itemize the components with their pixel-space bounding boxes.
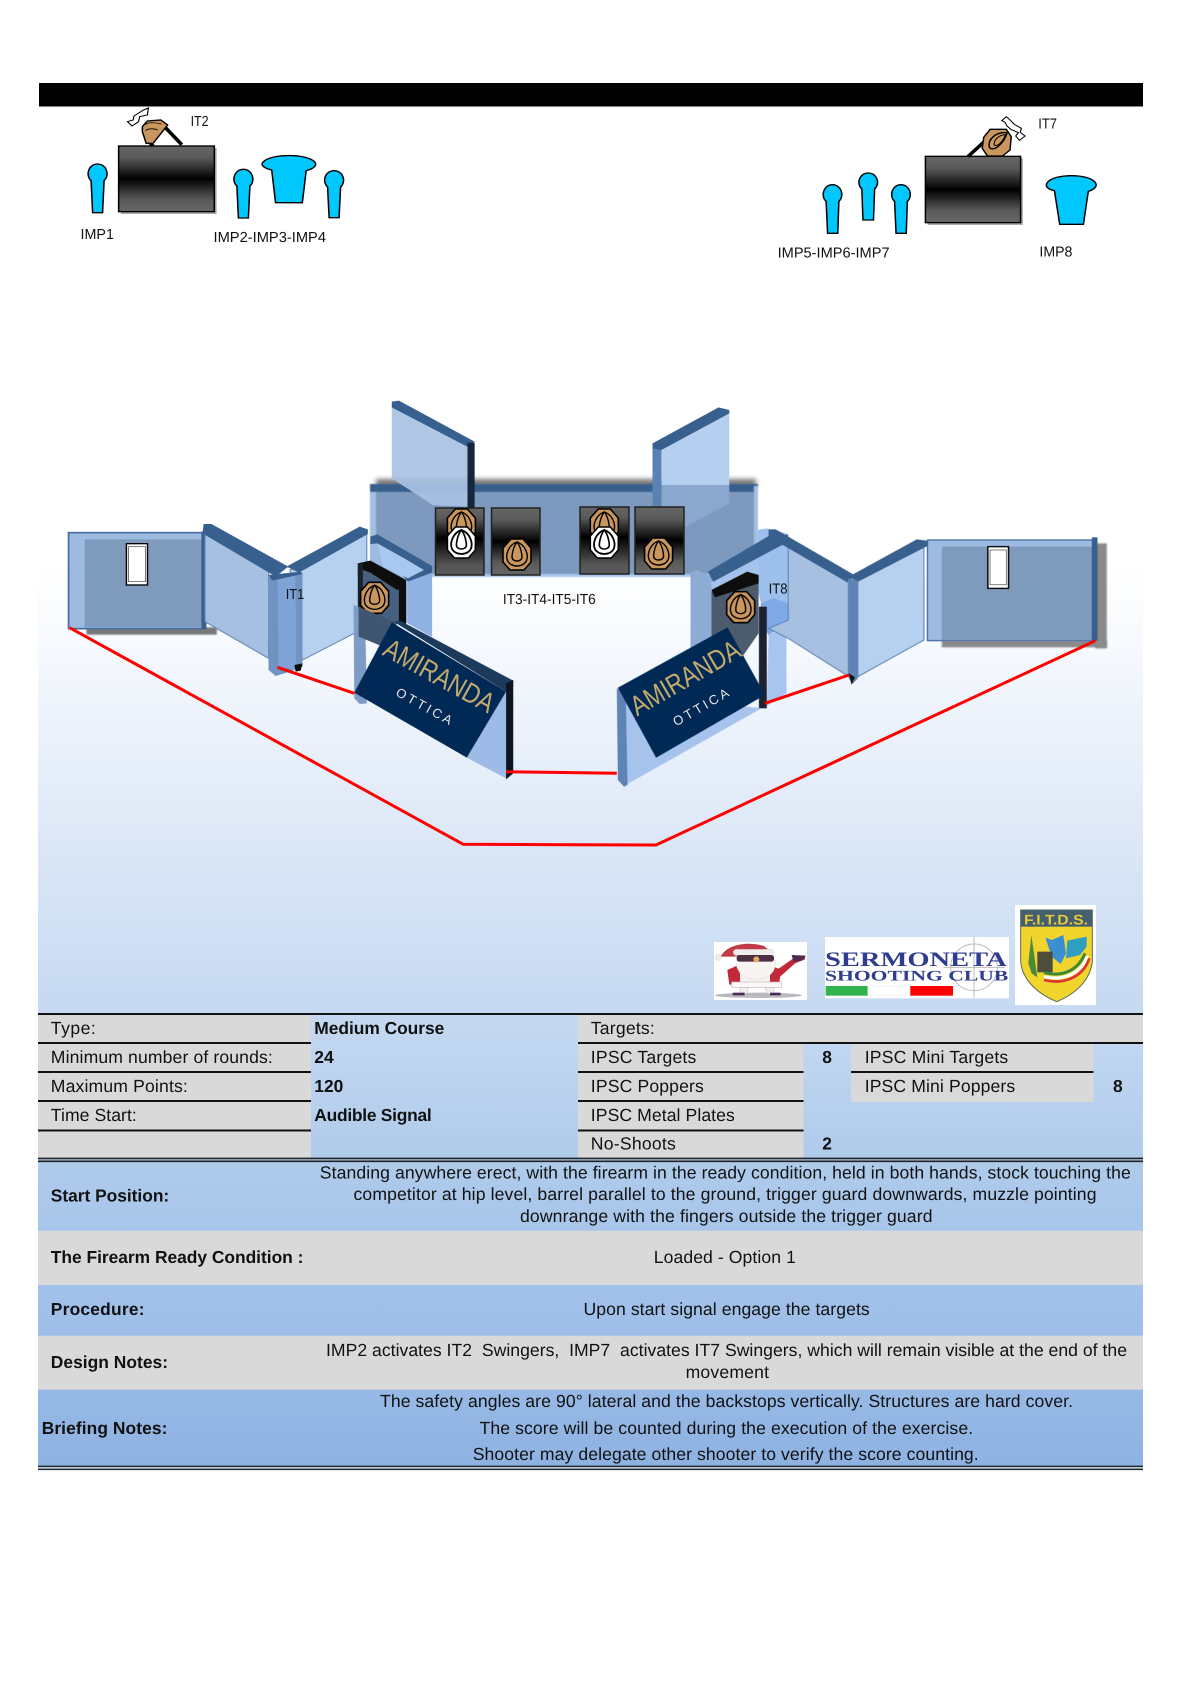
label: right sponsor logo text [625, 634, 746, 729]
fault line: inner centre [506, 772, 617, 773]
value: mini poppers count: 8 [1113, 1076, 1123, 1096]
panel: gradient background [38, 106, 1143, 1466]
text: Time Start: Time Start: [51, 1105, 137, 1125]
value: IPSC targets count: 8 [822, 1047, 832, 1067]
wall: right angled face [848, 539, 927, 685]
text: Maximum Points: Maximum Points: [51, 1076, 188, 1096]
text: Loaded - Option 1: Loaded - Option 1 [654, 1247, 796, 1267]
label: IT2: IT2 [191, 114, 209, 130]
icon: IMP6 popper [859, 173, 878, 220]
target frame: IT1 [358, 561, 406, 637]
right wing of walls [617, 528, 1107, 787]
text: Firearm Ready Condition label: The Firearm Ready Condition : [51, 1247, 303, 1267]
text: Design Notes label: Design Notes: [51, 1352, 168, 1372]
text: IPSC Poppers: IPSC Poppers [591, 1076, 704, 1096]
board: IT4 [492, 508, 540, 575]
double rule bottom [38, 1466, 1143, 1469]
logo: FITDS shield: F.I.T.D.S. [1024, 912, 1088, 927]
text: Procedure label: Procedure: [51, 1299, 144, 1319]
text: Medium Course: Medium Course [314, 1018, 445, 1038]
label: left sponsor logo text: AMIRANDA [378, 633, 500, 719]
text: Start Position line 1: Standing anywhere erect, with the firearm in the ready condition, held in both hands, stock touching the [320, 1162, 1131, 1182]
board: IT3 [436, 508, 484, 575]
text: Briefing line 1: The safety angles are 90° lateral and the backstops vertically. Structures are hard cover. [380, 1391, 1073, 1411]
board: IT2 cover [119, 146, 217, 214]
wall: sponsor wall [354, 621, 513, 779]
text: IPSC Mini Poppers: IPSC Mini Poppers [865, 1076, 1015, 1096]
logo: Sermoneta Shooting Club [825, 937, 1009, 998]
logo: Sermoneta Shooting Club: SHOOTING CLUB [825, 968, 1008, 984]
wall: left no-shoot wall [69, 532, 217, 635]
text: Design Notes line 2: movement [686, 1362, 769, 1382]
target: right no-shoot [988, 547, 1009, 588]
post at wall corner [268, 572, 302, 676]
label: IMP8: IMP8 [1039, 245, 1072, 261]
inset: left swinger and mini poppers [88, 108, 344, 218]
back left panel [392, 401, 475, 508]
label: IMP1: IMP1 [80, 227, 114, 243]
label: IT3-IT4-IT5-IT6: IT3-IT4-IT5-IT6 [503, 592, 596, 608]
icon: IMP1 popper [88, 164, 107, 213]
value: no-shoots count: 2 [822, 1134, 832, 1154]
label: IMP2-IMP3-IMP4: IMP2-IMP3-IMP4 [214, 230, 326, 246]
target: IT7 swinger [968, 129, 1011, 157]
logo: FITDS shield [1015, 905, 1096, 1005]
text: Start Position label: Start Position: [51, 1186, 169, 1206]
text: Minimum number of rounds: Minimum number of rounds: [51, 1047, 273, 1067]
text: No-Shoots: No-Shoots [591, 1134, 676, 1154]
fault line: inner right [765, 675, 849, 703]
grey cell: targets header [578, 1013, 1143, 1043]
icon: IMP5 popper [823, 185, 842, 233]
logos [714, 905, 1096, 1005]
target: left no-shoot [126, 544, 147, 585]
icon: IMP7 popper [892, 185, 910, 233]
target: IT1 [361, 582, 389, 613]
wall: IT1 face [286, 527, 368, 660]
text: IPSC Targets: IPSC Targets [591, 1047, 697, 1067]
grey cells: mini target types [851, 1043, 1094, 1102]
label: IT8: IT8 [769, 581, 788, 597]
target: IT4 [503, 539, 531, 570]
icon: IMP2 popper [234, 169, 253, 218]
board: IT5 [580, 507, 629, 574]
text: Targets: Targets: [591, 1018, 655, 1038]
wall: panel behind IT1 [370, 534, 432, 637]
text: Design Notes line 1: IMP2 activates IT2 Swingers, IMP7 activates IT7 Swingers, which will remain visible at the end of the [326, 1340, 1127, 1360]
grey cells: target types [578, 1043, 804, 1158]
text: IPSC Metal Plates: IPSC Metal Plates [591, 1105, 735, 1125]
logo: santa [714, 942, 807, 1000]
text: Briefing line 2: The score will be counted during the execution of the exercise. [480, 1418, 973, 1438]
panel: stage details table [38, 1013, 1143, 1469]
text: Briefing line 3: Shooter may delegate other shooter to verify the score counting. [473, 1444, 979, 1464]
grey band: firearm ready condition [38, 1231, 1143, 1285]
text: Briefing Notes label: Briefing Notes: [42, 1418, 167, 1438]
text: Procedure value: Upon start signal engage the targets [584, 1299, 870, 1319]
icon: IMP4 popper [325, 171, 344, 218]
text: Audible Signal: Audible Signal [314, 1105, 432, 1125]
title bar [39, 83, 1143, 106]
wall: angled face [769, 529, 854, 677]
text: 24: 24 [314, 1047, 334, 1067]
icon: IMP3 mini popper [262, 156, 316, 203]
board: IT7 cover [925, 156, 1023, 225]
label: right sponsor logo text: AMIRANDA [625, 634, 746, 722]
double rule [38, 1158, 1143, 1161]
icon: swing arrow [1002, 117, 1025, 140]
back right panel [652, 407, 729, 527]
board: IT6 [635, 507, 684, 574]
target: IT6 [645, 538, 673, 569]
wall: IT8 side back piece [691, 528, 788, 706]
target: IT2 swinger [142, 120, 182, 146]
text: 120: 120 [314, 1076, 343, 1096]
text: IPSC Mini Targets: IPSC Mini Targets [865, 1047, 1008, 1067]
grey band: design notes [38, 1336, 1143, 1390]
target: IT3 with no-shoot [447, 509, 475, 558]
label: left sponsor logo text: OTTICA [393, 684, 455, 728]
fault line: inner left [278, 667, 354, 693]
inset: right swinger and mini poppers [823, 117, 1096, 233]
back wall [370, 479, 758, 577]
logo: Sermoneta Shooting Club: SERMONETA [825, 948, 1007, 971]
target: IT8 [727, 592, 755, 623]
icon: swing arrow [127, 108, 148, 126]
icon: IMP8 mini popper [1046, 176, 1096, 224]
text: Start Position line 3: downrange with the fingers outside the trigger guard [520, 1206, 932, 1226]
wall: right no-shoot wall [927, 537, 1107, 648]
text: Start Position line 2: competitor at hip level, barrel parallel to the ground, trigger guard downwards, muzzle pointing [354, 1184, 1096, 1204]
target: IT5 with no-shoot [590, 509, 618, 558]
fault line: outer [70, 628, 1095, 845]
row dividers [38, 1014, 1143, 1130]
wall: sponsor wall [617, 627, 765, 787]
label: right sponsor logo text: OTTICA [670, 685, 732, 729]
label: IMP5-IMP6-IMP7: IMP5-IMP6-IMP7 [778, 245, 890, 261]
label: IT1: IT1 [286, 587, 304, 603]
text: Type: Type: [51, 1018, 96, 1038]
wall: lower post [354, 605, 397, 704]
target frame: IT8 [711, 572, 767, 708]
grey cells: left labels [38, 1013, 311, 1158]
label: IT7: IT7 [1038, 116, 1057, 132]
left wing of walls [69, 524, 513, 779]
wall: angled face [202, 524, 288, 658]
